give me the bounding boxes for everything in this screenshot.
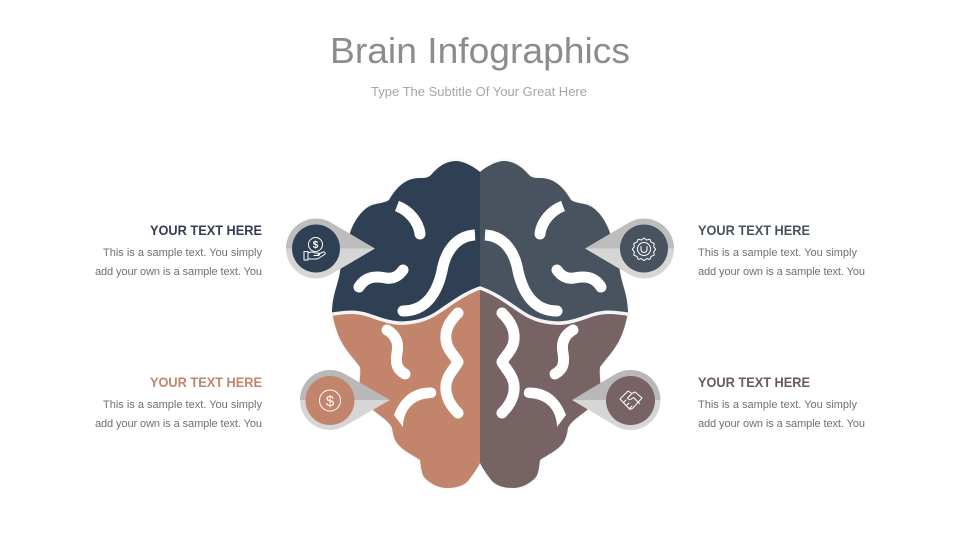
text block: bottom left: This is a sample text. You simply xyxy=(103,399,262,411)
text block: bottom left xyxy=(95,374,262,430)
lobe: bottom right xyxy=(480,280,628,488)
text block: top left xyxy=(95,222,262,278)
pin: top left xyxy=(286,219,375,278)
icon: gear xyxy=(632,238,656,261)
crease tapered xyxy=(394,388,436,427)
crease tapered xyxy=(524,388,566,427)
crease xyxy=(502,313,514,413)
text block: top right: YOUR TEXT HERE xyxy=(698,222,810,238)
text block: top left: YOUR TEXT HERE xyxy=(150,222,262,238)
crease xyxy=(403,235,475,311)
pin: bottom right xyxy=(572,370,660,430)
text block: bottom right: add your own is a sample text. You xyxy=(698,418,865,430)
lobe: top right xyxy=(480,161,628,323)
pin: bottom left xyxy=(300,370,390,430)
text block: bottom right: YOUR TEXT HERE xyxy=(698,374,810,390)
text block: bottom right: This is a sample text. You simply xyxy=(698,399,858,411)
text block: bottom left: add your own is a sample text. You xyxy=(95,418,262,430)
lobe: top left xyxy=(332,161,480,323)
crease xyxy=(555,330,573,374)
text block: top right xyxy=(698,222,865,278)
crease xyxy=(557,270,601,287)
title: Brain Infographics xyxy=(330,30,630,71)
crease end xyxy=(552,306,562,316)
text block: bottom right xyxy=(698,374,865,430)
text block: bottom left: YOUR TEXT HERE xyxy=(150,374,262,390)
crease xyxy=(485,235,557,311)
crease end xyxy=(414,228,426,240)
brain illustration xyxy=(330,160,630,488)
crease xyxy=(387,330,405,374)
hemisphere divider xyxy=(330,288,630,323)
pin: top right xyxy=(585,219,674,278)
icon: dollar coin: $ xyxy=(326,393,335,410)
lobe: bottom left xyxy=(332,280,480,488)
text block: top left: add your own is a sample text. You xyxy=(95,266,262,278)
crease xyxy=(397,206,420,233)
text block: top right: add your own is a sample text. You xyxy=(698,266,865,278)
crease end xyxy=(534,228,546,240)
icon: hand holding coin: $ xyxy=(313,240,319,251)
crease xyxy=(540,206,563,233)
brain soft outline xyxy=(332,160,628,488)
icon: handshake xyxy=(620,391,642,410)
crease xyxy=(446,313,458,413)
text block: top right: This is a sample text. You simply xyxy=(698,247,858,259)
crease end xyxy=(398,306,408,316)
text block: top left: This is a sample text. You simply xyxy=(103,247,262,259)
crease xyxy=(359,270,403,287)
subtitle: Type The Subtitle Of Your Great Here xyxy=(371,84,587,99)
